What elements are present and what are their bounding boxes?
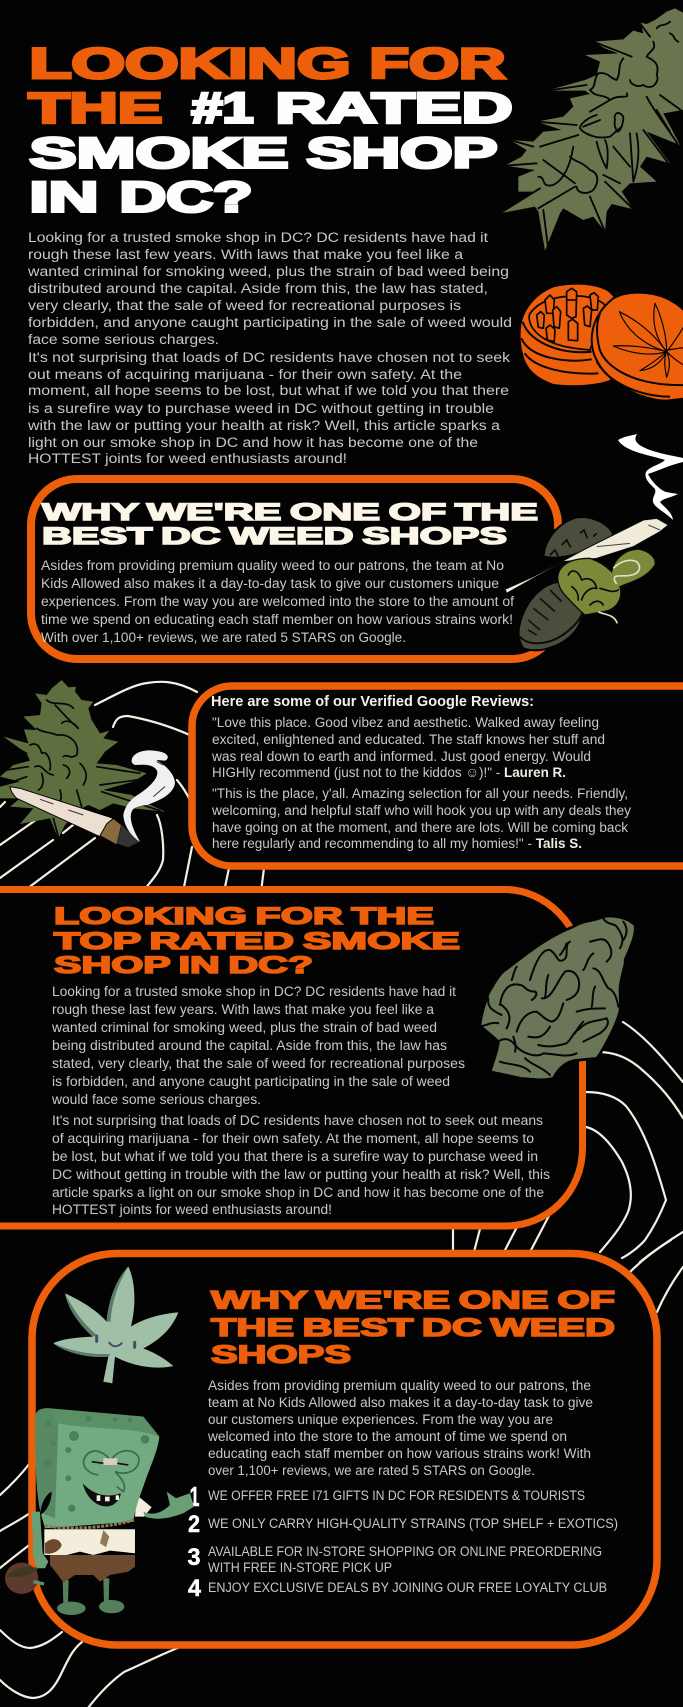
sponge body bbox=[35, 1408, 159, 1528]
body text: team at No Kids Allowed also makes it a day-to-day task to give bbox=[208, 1395, 593, 1411]
title: #1 bbox=[192, 84, 254, 132]
title: DC? bbox=[120, 174, 252, 222]
body text: is forbidden, and anyone caught participating in the sale of weed bbox=[52, 1074, 450, 1090]
intro text block bbox=[27, 230, 512, 467]
numbered list: ENJOY EXCLUSIVE DEALS BY JOINING OUR FREE LOYALTY CLUB bbox=[208, 1580, 607, 1596]
intro text block: light on our smoke shop in DC and how it has become one of the bbox=[28, 435, 478, 451]
heading: SHOP IN DC? bbox=[54, 952, 313, 979]
title: RATED bbox=[276, 84, 512, 132]
intro text block: wanted criminal for smoking weed, plus the strain of bad weed being bbox=[27, 264, 509, 280]
intro text block: is a surefire way to purchase weed in DC without getting in trouble bbox=[28, 401, 494, 417]
heading: WHY WE'RE ONE OF THE bbox=[42, 499, 538, 526]
review: Talis S. bbox=[211, 786, 632, 852]
body text: HOTTEST joints for weed enthusiasts around! bbox=[52, 1202, 332, 1218]
panel: verified google reviews bbox=[192, 686, 683, 866]
heading bbox=[54, 903, 460, 979]
review: Talis S.: welcoming, and helpful staff who will hook you up with any deals they bbox=[211, 803, 632, 819]
numbered list bbox=[188, 1481, 618, 1602]
numbered list: 3 bbox=[188, 1544, 200, 1571]
numbered list: WE ONLY CARRY HIGH-QUALITY STRAINS (TOP SHELF + EXOTICS) bbox=[208, 1516, 618, 1532]
review: Talis S.: "This is the place, y'all. Amazing selection for all your needs. Friendly, bbox=[212, 786, 628, 802]
intro text block: It's not surprising that loads of DC residents have chosen not to seek bbox=[28, 350, 511, 366]
right arm bbox=[135, 1495, 152, 1517]
body text: being distributed around the capital. Aside from this, the law has bbox=[52, 1038, 447, 1054]
heading: TOP RATED SMOKE bbox=[54, 928, 460, 955]
title: THE bbox=[28, 84, 162, 132]
panel: looking for the top rated smoke shop bbox=[0, 890, 582, 1226]
numbered list: AVAILABLE FOR IN-STORE SHOPPING OR ONLINE PREORDERING bbox=[208, 1544, 602, 1560]
body text: educating each staff member on how various strains work! With bbox=[208, 1446, 591, 1462]
mouth bbox=[83, 1483, 121, 1506]
panel: why we're one of the best (bottom) bbox=[32, 1254, 657, 1645]
review: Lauren R.: excited, enlightened and educated. The staff knows her stuff and bbox=[212, 732, 605, 748]
numbered list: 1 bbox=[190, 1481, 200, 1512]
body text: Asides from providing premium quality weed to our patrons, the team at No bbox=[41, 558, 504, 574]
intro text block: with the law or putting your health at risk? Well, this article sparks a bbox=[27, 418, 500, 434]
body text: would face some serious charges. bbox=[51, 1092, 261, 1108]
icon: cannabis nug bbox=[480, 916, 635, 1080]
intro text block: out means of acquiring marijuana - for their own safety. At the bbox=[28, 367, 462, 383]
body text: wanted criminal for smoking weed, plus the strain of bad weed bbox=[51, 1020, 437, 1036]
intro text block: face some serious charges. bbox=[28, 332, 219, 348]
icon: cannabis plant with joint bbox=[0, 680, 175, 847]
body text: be lost, but what if we told you that there is a surefire way to purchase weed in bbox=[52, 1149, 538, 1165]
shorts bbox=[50, 1555, 135, 1583]
body text: rough these last few years. With laws that make you feel like a bbox=[52, 1002, 434, 1018]
icon: cartoon sponge character bbox=[5, 1408, 194, 1615]
review: Talis S.: have going on at the moment, and there are lots. Will be coming back bbox=[212, 820, 629, 836]
intro text block: Looking for a trusted smoke shop in DC? DC residents have had it bbox=[28, 230, 488, 246]
review: Lauren R.: "Love this place. Good vibez and aesthetic. Walked away feeling bbox=[212, 715, 599, 731]
heading: Here are some of our Verified Google Reviews: bbox=[211, 694, 534, 710]
body text: Asides from providing premium quality weed to our patrons, the bbox=[208, 1378, 591, 1394]
icon: orange grinder bbox=[521, 285, 683, 401]
heading: SHOPS bbox=[211, 1341, 351, 1369]
body text: With over 1,100+ reviews, we are rated 5 STARS on Google. bbox=[41, 630, 406, 646]
heading: THE BEST DC WEED bbox=[211, 1314, 615, 1342]
body text: time we spend on educating each staff member on how various strains work! bbox=[41, 612, 513, 628]
heading bbox=[42, 499, 538, 550]
shirt bbox=[44, 1529, 135, 1555]
icon: smoke swirl bbox=[618, 434, 683, 520]
icon: smiling cannabis leaf bbox=[53, 1267, 178, 1383]
body text: It's not surprising that loads of DC residents have chosen not to seek out means bbox=[52, 1113, 543, 1129]
intro text block: very clearly, that the sale of weed for recreational purposes is bbox=[28, 298, 461, 314]
intro text block: forbidden, and anyone caught participating in the sale of weed would bbox=[28, 315, 512, 331]
heading bbox=[211, 1286, 615, 1369]
title: LOOKING bbox=[30, 40, 350, 88]
body text: DC without getting in trouble with the law or putting your health at risk? Well, this bbox=[52, 1167, 550, 1183]
body text: our customers unique experiences. From the way you are bbox=[208, 1412, 553, 1428]
intro text block: HOTTEST joints for weed enthusiasts around! bbox=[28, 451, 347, 467]
title: SMOKE bbox=[30, 130, 288, 178]
left arm bbox=[32, 1512, 48, 1568]
numbered list: WE OFFER FREE I71 GIFTS IN DC FOR RESIDENTS & TOURISTS bbox=[208, 1488, 585, 1504]
intro text block: rough these last few years. With laws that make you feel like a bbox=[28, 247, 463, 263]
heading: LOOKING FOR THE bbox=[54, 903, 434, 930]
body text bbox=[207, 1378, 593, 1479]
legs and shoes bbox=[57, 1578, 124, 1615]
title bbox=[28, 40, 512, 222]
title: SHOP bbox=[306, 130, 498, 178]
numbered list: 4 bbox=[188, 1575, 202, 1602]
title: IN bbox=[30, 174, 98, 222]
review: Talis S.: here regularly and recommending to all my homies!" - Talis S. bbox=[212, 836, 582, 852]
numbered list: WITH FREE IN-STORE PICK UP bbox=[208, 1560, 392, 1576]
heading: BEST DC WEED SHOPS bbox=[42, 523, 507, 550]
necklace bbox=[45, 1520, 134, 1528]
body text: of acquiring marijuana - for their own safety. At the moment, all hope seems to bbox=[52, 1131, 534, 1147]
body text bbox=[41, 558, 514, 646]
intro text block: moment, all hope seems to be lost, but what if we told you that there bbox=[28, 383, 509, 399]
body text: stated, very clearly, that the sale of weed for recreational purposes bbox=[52, 1056, 465, 1072]
review: Lauren R.: HIGHly recommend (just not to the kiddos ☺)!" - Lauren R. bbox=[212, 765, 566, 781]
icon: joint, bud and grinder bbox=[505, 517, 668, 664]
body text: welcomed into the store to the amount of time we spend on bbox=[207, 1429, 567, 1445]
title: FOR bbox=[370, 40, 506, 88]
body text: experiences. From the way you are welcomed into the store to the amount of bbox=[41, 594, 514, 610]
intro text block: distributed around the capital. Aside from this, the law has stated, bbox=[28, 281, 488, 297]
review: Lauren R.: was real down to earth and informed. Just good energy. Would bbox=[211, 749, 591, 765]
bag bbox=[5, 1563, 44, 1594]
panel: why we're one of the best (top) bbox=[31, 479, 558, 659]
body text bbox=[51, 984, 550, 1218]
review: Lauren R. bbox=[211, 715, 605, 781]
body text: article sparks a light on our smoke shop in DC and how it has become one of the bbox=[52, 1185, 544, 1201]
icon: white smoke bbox=[123, 750, 175, 842]
body text: Looking for a trusted smoke shop in DC? DC residents have had it bbox=[52, 984, 456, 1000]
numbered list: 2 bbox=[188, 1511, 200, 1538]
body text: Kids Allowed also makes it a day-to-day task to give our customers unique bbox=[41, 576, 499, 592]
icon: cannabis bud top right bbox=[500, 8, 683, 251]
body text: over 1,100+ reviews, we are rated 5 STARS on Google. bbox=[208, 1463, 535, 1479]
heading: WHY WE'RE ONE OF bbox=[211, 1286, 615, 1314]
